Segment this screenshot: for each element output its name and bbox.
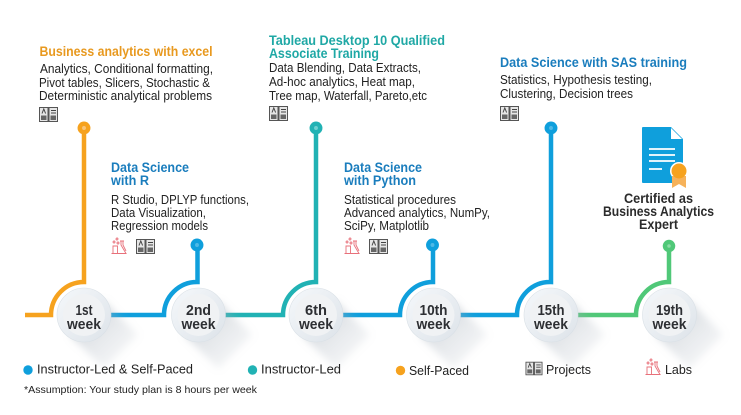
icon: lab flask: [344, 238, 360, 254]
week badge: 2nd: 2nd: [186, 303, 211, 319]
panel: Data Science with R: [110, 160, 249, 254]
callout: certified: Business Analytics: [603, 204, 714, 219]
week badge: 1st: [57, 288, 138, 369]
panel: Data Science with Python: Advanced analytics, NumPy,: [344, 206, 490, 220]
footnote: *Assumption: Your study plan is 8 hours per week: [24, 384, 258, 396]
panel: Tableau Desktop 10 Qualified Associate Training: Data Blending, Data Extracts,: [269, 61, 421, 75]
week badge: 10th: 10th: [420, 303, 448, 319]
legend: Labs: [646, 359, 692, 377]
legend: Projects: [526, 362, 591, 377]
week badge: 19th: week: [652, 317, 687, 333]
panel: Data Science with Python: [343, 160, 490, 254]
week badge: 6th: 6th: [305, 303, 327, 319]
icon: certificate: [642, 127, 688, 188]
callout: certified: [603, 191, 714, 232]
panel: Business analytics with excel: [39, 44, 213, 122]
icon: project book: [500, 106, 518, 120]
timeline segment: 6th week (teal): [222, 124, 320, 315]
legend: Projects: Projects: [546, 362, 591, 377]
panel: Data Science with R: Data Science: [111, 160, 189, 175]
week badge: 6th: week: [298, 317, 334, 333]
panel: Data Science with SAS training: Clustering, Decision trees: [500, 87, 633, 101]
week badge: 19th: [642, 288, 724, 369]
icon: project book: [270, 106, 288, 120]
callout: certified: Expert: [639, 217, 678, 232]
icon: project book: [40, 108, 58, 122]
timeline segment: 15th week (blue): [458, 124, 555, 315]
week badge: 6th: [289, 288, 370, 369]
panel: Business analytics with excel: Pivot tables, Slicers, Stochastic &: [39, 76, 211, 90]
timeline segment: 2nd week (blue): [108, 241, 201, 315]
panel: Tableau Desktop 10 Qualified Associate Training: Tableau Desktop 10 Qualified: [269, 33, 445, 48]
panel: Data Science with R: Data Visualization,: [111, 206, 206, 220]
callout: certified: Certified as: [624, 191, 693, 206]
week badge: 2nd: week: [181, 317, 216, 333]
week badge: 2nd: [172, 288, 252, 369]
week badge: 15th: week: [533, 317, 569, 333]
week badge: 19th: 19th: [656, 303, 683, 319]
panel: Data Science with Python: with Python: [343, 173, 416, 188]
icon: project book: [370, 240, 388, 254]
panel: Data Science with Python: Data Science: [344, 160, 422, 175]
panel: Data Science with SAS training: Statistics, Hypothesis testing,: [500, 73, 652, 87]
week badge: 15th: [524, 288, 605, 369]
week badge: 10th: [406, 288, 488, 369]
week badge: 1st: week: [66, 317, 102, 333]
timeline segment: 1st week (orange): [25, 124, 88, 315]
panel: Tableau Desktop 10 Qualified Associate Training: [269, 33, 445, 120]
timeline segment: 19th week (green): [575, 242, 673, 315]
panel: Data Science with Python: Statistical procedures: [344, 193, 456, 207]
icon: lab flask: [112, 238, 126, 254]
legend: Labs: Labs: [665, 362, 692, 377]
panel: Data Science with R: Regression models: [111, 219, 208, 233]
week badge: 10th: week: [416, 317, 451, 333]
icon: project book: [136, 240, 154, 254]
panel: Data Science with R: R Studio, DPLYP functions,: [111, 193, 249, 207]
panel: Tableau Desktop 10 Qualified Associate Training: Tree map, Waterfall, Pareto,etc: [269, 89, 427, 103]
panel: Data Science with R: with R: [110, 173, 149, 188]
panel: Tableau Desktop 10 Qualified Associate Training: Ad-hoc analytics, Heat map,: [269, 75, 415, 89]
legend: Instructor-Led & Self-Paced: Instructor-Led & Self-Paced: [37, 362, 193, 376]
panel: Tableau Desktop 10 Qualified Associate Training: Associate Training: [269, 46, 379, 61]
panel: Business analytics with excel: Analytics, Conditional formatting,: [40, 62, 213, 76]
week badge: 15th: 15th: [538, 303, 564, 319]
week badge: 1st: 1st: [76, 303, 93, 319]
legend: Instructor-Led: Instructor-Led: [261, 362, 341, 376]
panel: Data Science with Python: SciPy, Matplotlib: [344, 219, 429, 233]
panel: Business analytics with excel: Business analytics with excel: [40, 44, 212, 59]
panel: Data Science with SAS training: [500, 55, 687, 120]
timeline segment: 10th week (blue): [340, 241, 437, 315]
panel: Business analytics with excel: Deterministic analytical problems: [39, 89, 212, 103]
panel: Data Science with SAS training: Data Science with SAS training: [500, 55, 687, 70]
legend: Self-Paced: Self-Paced: [409, 363, 469, 378]
